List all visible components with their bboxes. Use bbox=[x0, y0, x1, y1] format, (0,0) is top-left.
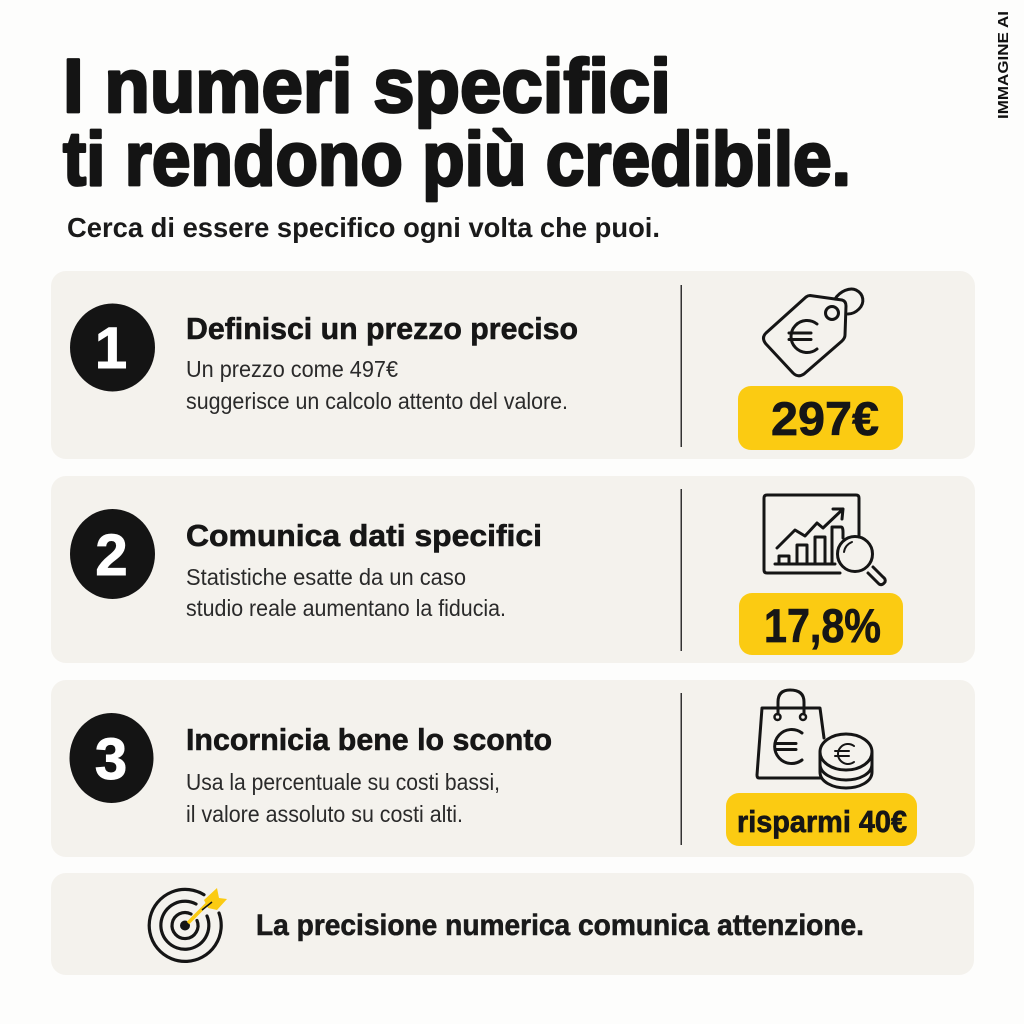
value badge: 17,8% bbox=[739, 593, 903, 655]
title bbox=[63, 44, 851, 202]
value badge: risparmi 40€: risparmi 40€ bbox=[737, 804, 907, 839]
value badge: 297€: 297€ bbox=[771, 392, 879, 445]
value badge: risparmi 40€ bbox=[726, 793, 917, 846]
text: step 1 description bbox=[186, 356, 568, 414]
text: step 2 description bbox=[186, 564, 506, 621]
icon: shopping bag and coins bbox=[757, 690, 872, 788]
number badge 2: 2 bbox=[95, 523, 128, 588]
text: step 3 description: il valore assoluto su costi alti. bbox=[186, 801, 463, 827]
number badge 1: 1 bbox=[95, 316, 127, 381]
text: step 2 description: Statistiche esatte da un caso bbox=[186, 564, 466, 590]
number badge 2 bbox=[70, 509, 155, 599]
text: step 3 description: Usa la percentuale su costi bassi, bbox=[186, 769, 500, 795]
text: step 3 description bbox=[186, 769, 500, 827]
watermark: IMMAGINE AI: IMMAGINE AI bbox=[996, 11, 1012, 119]
text: step 2 description: studio reale aumentano la fiducia. bbox=[186, 595, 506, 621]
number badge 3: 3 bbox=[95, 727, 127, 792]
panel: step 1 bbox=[51, 271, 975, 459]
icon: price tag bbox=[764, 289, 863, 376]
icon: chart with magnifier bbox=[764, 495, 885, 585]
panel: conclusion bbox=[51, 873, 974, 975]
text: conclusion: La precisione numerica comunica attenzione. bbox=[256, 909, 864, 942]
value badge: 17,8%: 17,8% bbox=[764, 599, 881, 652]
subtitle: Cerca di essere specifico ogni volta che puoi. bbox=[67, 212, 660, 243]
title: ti rendono più credibile. bbox=[63, 117, 851, 202]
icon: target with arrow bbox=[149, 888, 227, 961]
title: I numeri specifici bbox=[63, 44, 671, 129]
heading: step 1: Definisci un prezzo preciso bbox=[186, 311, 578, 346]
text: step 1 description: Un prezzo come 497€ bbox=[186, 356, 398, 382]
number badge 3 bbox=[70, 713, 154, 803]
value badge: 297€ bbox=[738, 386, 903, 450]
text: step 1 description: suggerisce un calcolo attento del valore. bbox=[186, 388, 568, 414]
heading: step 3: Incornicia bene lo sconto bbox=[186, 722, 552, 757]
number badge 1 bbox=[70, 304, 155, 392]
panel: step 3 bbox=[51, 680, 975, 857]
heading: step 2: Comunica dati specifici bbox=[186, 518, 542, 553]
panel: step 2 bbox=[51, 476, 975, 663]
